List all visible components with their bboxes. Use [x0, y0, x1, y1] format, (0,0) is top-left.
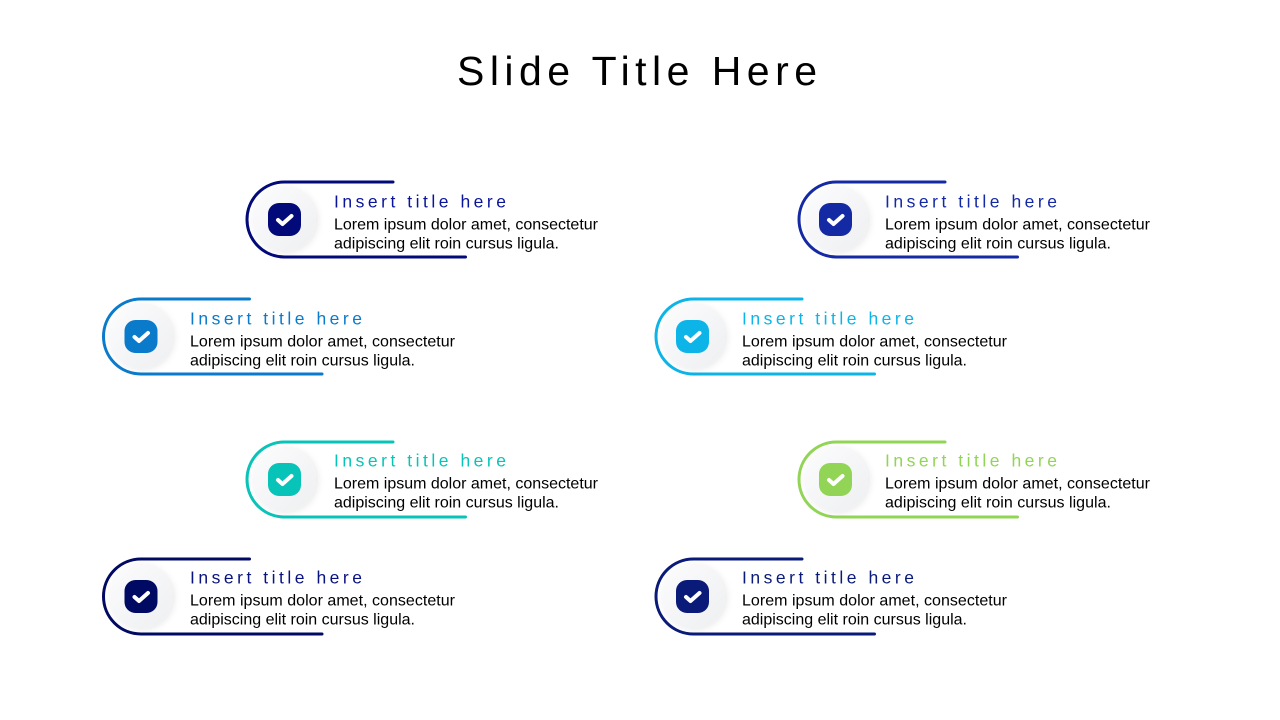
heading: Insert title here	[190, 568, 362, 588]
bracket outline	[656, 559, 874, 634]
bracket outline	[247, 182, 466, 257]
bracket outline	[247, 442, 466, 517]
body text: Lorem ipsum dolor amet, consectetur	[190, 334, 456, 350]
body text: Lorem ipsum dolor amet, consectetur	[334, 216, 599, 234]
card: top left lower, blue: adipiscing elit roin cursus ligula.	[190, 352, 415, 370]
icon: check badge	[124, 580, 158, 613]
bracket outline	[104, 559, 322, 634]
card: bottom left lower, navy	[104, 559, 456, 634]
card: bottom right lower, dark blue	[656, 559, 1008, 634]
heading: Insert title here	[742, 568, 914, 588]
card: top right upper, royal blue	[799, 182, 1151, 257]
card: top right lower, cyan: adipiscing elit roin cursus ligula.	[742, 352, 967, 370]
disc	[804, 188, 868, 252]
icon: check badge	[819, 203, 852, 236]
bracket outline	[799, 442, 1018, 517]
card: top left upper, navy	[247, 182, 599, 257]
heading: Insert title here	[334, 192, 506, 212]
title: Slide Title Here	[457, 48, 817, 94]
card: top left upper, navy: adipiscing elit roin cursus ligula.	[334, 236, 559, 252]
card: bottom left upper, teal	[247, 442, 599, 517]
body text: Lorem ipsum dolor amet, consectetur	[742, 334, 1008, 350]
icon: check badge	[268, 203, 301, 236]
card: bottom left upper, teal: adipiscing elit roin cursus ligula.	[334, 494, 559, 512]
heading: Insert title here	[742, 308, 914, 328]
icon: check badge	[676, 320, 709, 353]
body text: Lorem ipsum dolor amet, consectetur	[885, 476, 1151, 492]
disc	[108, 564, 172, 628]
card: top right lower, cyan	[656, 299, 1008, 374]
body text: Lorem ipsum dolor amet, consectetur	[190, 592, 456, 610]
disc	[804, 448, 868, 512]
card: bottom right upper, green	[799, 442, 1151, 517]
disc	[252, 448, 316, 512]
heading: Insert title here	[334, 450, 506, 470]
card: bottom right lower, dark blue: adipiscing elit roin cursus ligula.	[742, 612, 967, 628]
icon: check badge	[268, 463, 301, 496]
icon: check badge	[676, 580, 709, 613]
body text: Lorem ipsum dolor amet, consectetur	[885, 216, 1151, 234]
icon: check badge	[124, 320, 158, 353]
disc	[252, 188, 316, 252]
body text: Lorem ipsum dolor amet, consectetur	[334, 476, 599, 492]
bracket outline	[104, 299, 322, 374]
icon: check badge	[819, 463, 852, 496]
card: top right upper, royal blue: adipiscing elit roin cursus ligula.	[885, 236, 1111, 252]
heading: Insert title here	[885, 192, 1057, 212]
bracket outline	[799, 182, 1018, 257]
card: bottom right upper, green: adipiscing elit roin cursus ligula.	[885, 494, 1111, 512]
disc	[661, 304, 725, 368]
bracket outline	[656, 299, 874, 374]
body text: Lorem ipsum dolor amet, consectetur	[742, 592, 1008, 610]
heading: Insert title here	[190, 308, 362, 328]
card: top left lower, blue	[104, 299, 456, 374]
disc	[661, 564, 725, 628]
heading: Insert title here	[885, 450, 1057, 470]
disc	[108, 304, 172, 368]
card: bottom left lower, navy: adipiscing elit roin cursus ligula.	[190, 612, 415, 628]
